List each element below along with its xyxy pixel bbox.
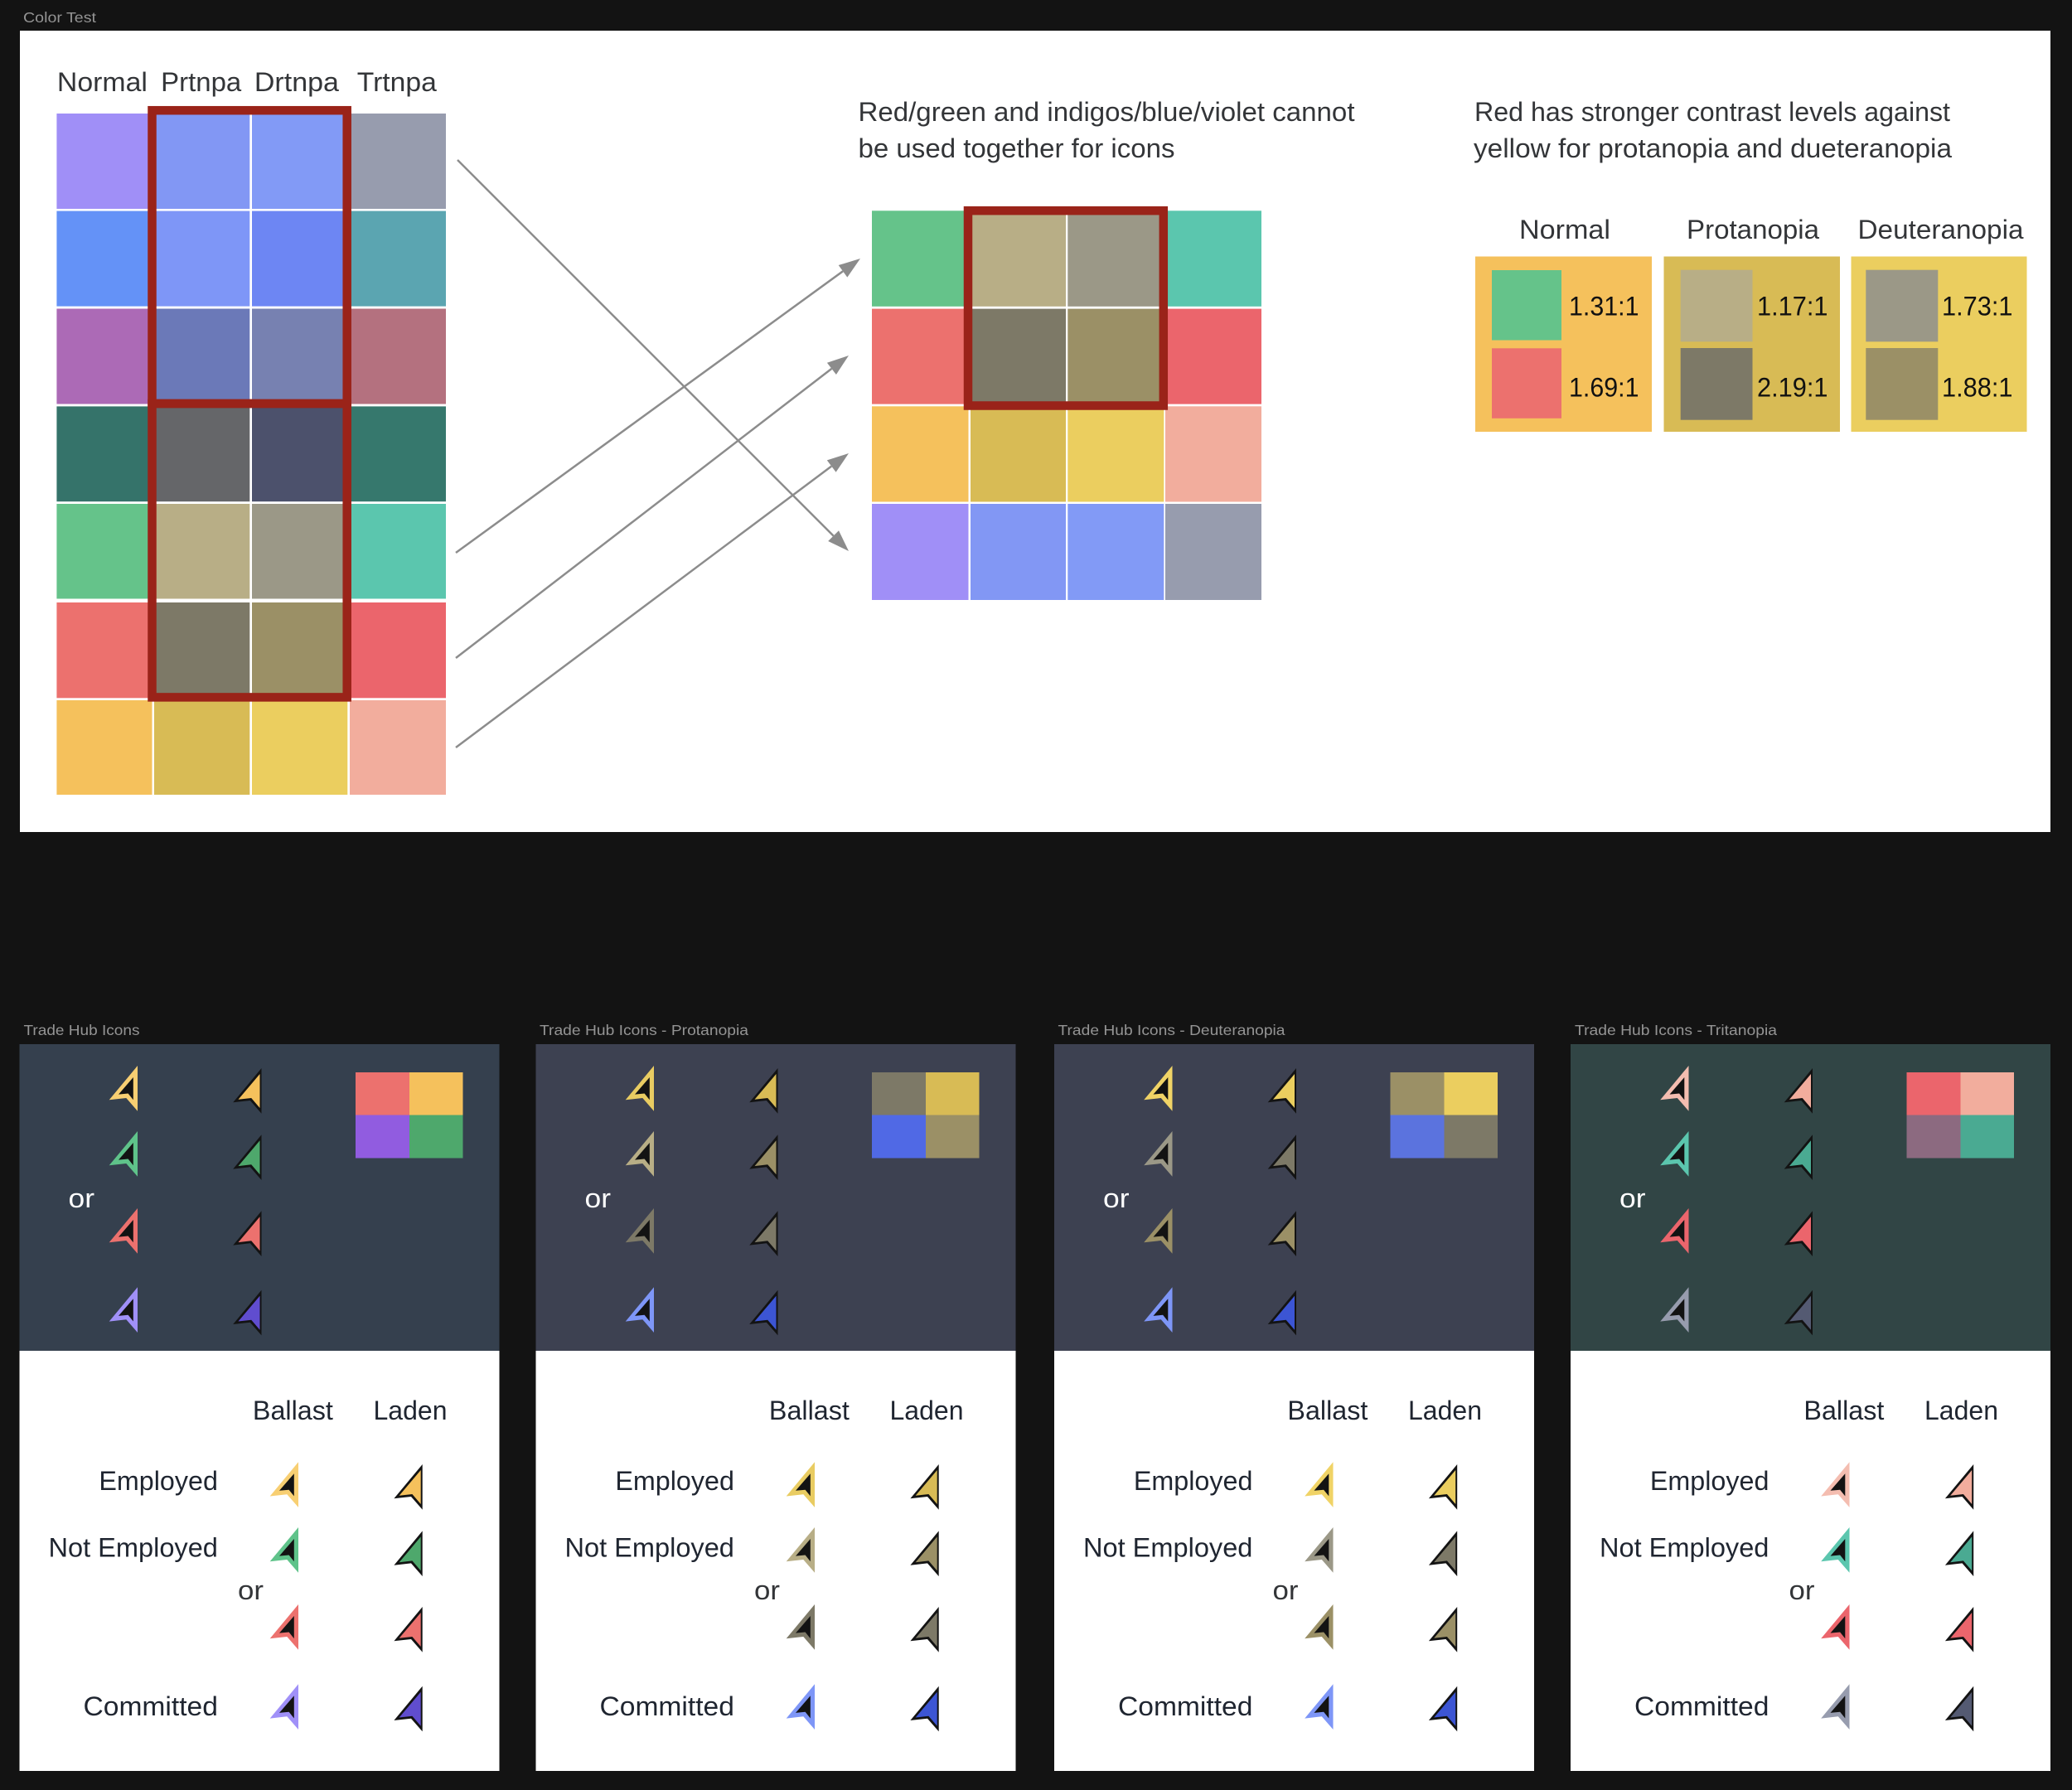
reduced color grid (872, 210, 1261, 600)
icon: ballast olive (1305, 1604, 1333, 1650)
icon: laden red (1945, 1607, 1973, 1652)
label: or: or (1619, 1183, 1646, 1213)
icon: solid tan (749, 1134, 777, 1180)
icon: solid olive (1268, 1211, 1296, 1256)
icon: outlined yellow (109, 1066, 138, 1111)
icon: solid blue (1268, 1290, 1296, 1335)
icon: outlined yellow (626, 1066, 654, 1111)
icon: solid yellow (233, 1068, 262, 1114)
label: Employed: Employed (99, 1466, 218, 1496)
icon: outlined teal (1660, 1131, 1689, 1177)
heading: Protanopia contrast: Protanopia (1687, 215, 1819, 244)
legend background (1054, 1351, 1534, 1771)
icon: laden blue (1429, 1686, 1457, 1731)
heading: Laden: Laden (1924, 1396, 1998, 1425)
heading: Ballast: Ballast (1287, 1396, 1368, 1425)
icon: solid red (233, 1211, 262, 1256)
contrast card: Deuteranopia (1852, 257, 2027, 432)
icon: laden tan (910, 1531, 939, 1576)
icon: ballast gray (1821, 1684, 1850, 1730)
text block: contrast note (1474, 97, 1952, 163)
map preview background (1054, 1044, 1534, 1351)
icon: laden olive (1429, 1607, 1457, 1652)
icon: ballast gray (1305, 1527, 1333, 1573)
icon: laden olive (910, 1607, 939, 1652)
label: Not Employed: Not Employed (48, 1533, 218, 1563)
heading: Tritanopia column: Trtnpa (357, 67, 437, 97)
heading: Protanopia column: Prtnpa (161, 67, 241, 97)
heading: Ballast: Ballast (769, 1396, 850, 1425)
icon: outlined red (1660, 1208, 1689, 1254)
icon: outlined violet (109, 1287, 138, 1333)
label: Committed: Committed (600, 1691, 734, 1721)
icon: laden yellow (910, 1464, 939, 1510)
contrast card: Deuteranopia: 1.88:1 (1942, 373, 2012, 403)
label: Not Employed: Not Employed (565, 1533, 734, 1563)
label: or: or (1103, 1183, 1130, 1213)
icon: laden dark olive (1429, 1531, 1457, 1576)
panel: color test (20, 31, 2050, 832)
panel: Trade Hub Icons - Protanopia (535, 1022, 1016, 1771)
label: Not Employed: Not Employed (1600, 1533, 1769, 1563)
contrast card: Normal (1475, 257, 1652, 432)
contrast card: Protanopia: 1.17:1 (1757, 292, 1828, 322)
icon: laden peach (1945, 1464, 1973, 1510)
icon: ballast red (1821, 1604, 1850, 1650)
label: Committed: Committed (1118, 1691, 1252, 1721)
contrast card: Normal: 1.31:1 (1569, 292, 1639, 322)
label: or: or (754, 1575, 780, 1605)
label: or: or (1273, 1575, 1299, 1605)
heading: Deuteranopia column: Drtnpa (254, 67, 339, 97)
heading: Laden: Laden (373, 1396, 448, 1425)
color swatches (872, 1072, 980, 1159)
frame label: Color Test: Color Test (23, 9, 96, 26)
icon: ballast dark olive (787, 1604, 815, 1650)
panel: Trade Hub Icons (20, 1022, 499, 1771)
frame label: Trade Hub Icons - Protanopia (540, 1022, 748, 1038)
label: or: or (238, 1575, 264, 1605)
icon: solid red (1784, 1211, 1813, 1256)
icon: ballast red (270, 1604, 298, 1650)
label: or: or (585, 1183, 611, 1213)
icon: laden red (394, 1607, 423, 1652)
icon: outlined gray (1144, 1131, 1172, 1177)
label: Employed: Employed (1650, 1466, 1769, 1496)
icon: solid olive (749, 1211, 777, 1256)
text block: icon color note: Red/green and indigos/blue/violet cannot (859, 97, 1355, 127)
icon: outlined olive (1144, 1208, 1172, 1254)
icon: ballast blue (1305, 1684, 1333, 1730)
arrow: yellow row to reduced grid (456, 453, 849, 747)
icon: solid slate (1784, 1290, 1813, 1335)
icon: ballast green (270, 1527, 298, 1573)
highlight: red and green cells (968, 210, 1164, 406)
label: or: or (68, 1183, 94, 1213)
legend background (20, 1351, 499, 1771)
color swatches (1906, 1072, 2014, 1159)
contrast card: Normal: 1.69:1 (1569, 373, 1639, 403)
panel: Trade Hub Icons - Deuteranopia (1054, 1022, 1534, 1771)
icon: solid teal (1784, 1134, 1813, 1180)
icon: ballast yellow (1305, 1462, 1333, 1507)
icon: laden slate (1945, 1686, 1973, 1731)
label: Employed: Employed (615, 1466, 734, 1496)
icon: solid violet (233, 1290, 262, 1335)
icon: solid blue (749, 1290, 777, 1335)
icon: laden violet (394, 1686, 423, 1731)
panel: Trade Hub Icons - Tritanopia (1571, 1022, 2050, 1771)
contrast card: Protanopia: 2.19:1 (1757, 373, 1828, 403)
arrow: violet row to reduced grid (457, 160, 849, 551)
heading: Laden: Laden (1408, 1396, 1482, 1425)
text block: icon color note: be used together for icons (859, 133, 1175, 163)
icon: ballast blue (787, 1684, 815, 1730)
icon: ballast tan (787, 1527, 815, 1573)
contrast card: Deuteranopia: 1.73:1 (1942, 292, 2012, 322)
icon: ballast violet (270, 1684, 298, 1730)
heading: Normal contrast: Normal (1519, 215, 1610, 244)
text block: contrast note: yellow for protanopia and dueteranopia (1474, 133, 1952, 163)
icon: outlined blue (626, 1287, 654, 1333)
icon: ballast teal (1821, 1527, 1850, 1573)
legend background (535, 1351, 1016, 1771)
label: or: or (1789, 1575, 1815, 1605)
icon: solid peach (1784, 1068, 1813, 1114)
frame label: Trade Hub Icons - Deuteranopia (1058, 1022, 1285, 1038)
icon: solid yellow (749, 1068, 777, 1114)
icon: ballast peach (1821, 1462, 1850, 1507)
icon: outlined gray (1660, 1287, 1689, 1333)
contrast card: Protanopia (1664, 257, 1840, 432)
highlight: green, red and yellow group (152, 404, 347, 697)
icon: outlined peach (1660, 1066, 1689, 1111)
heading: Ballast: Ballast (1803, 1396, 1885, 1425)
icon: laden teal (1945, 1531, 1973, 1576)
label: Committed: Committed (1634, 1691, 1769, 1721)
legend background (1571, 1351, 2050, 1771)
text block: contrast note: Red has stronger contrast levels against (1474, 97, 1950, 127)
icon: outlined dark olive (626, 1208, 654, 1254)
map preview background (20, 1044, 499, 1351)
icon: outlined yellow (1144, 1066, 1172, 1111)
map preview background (1571, 1044, 2050, 1351)
label: Employed: Employed (1134, 1466, 1252, 1496)
frame label: Trade Hub Icons - Tritanopia (1575, 1022, 1777, 1038)
icon: outlined tan (626, 1131, 654, 1177)
icon: solid yellow (1268, 1068, 1296, 1114)
arrow: red row to reduced grid (456, 356, 849, 658)
icon: laden yellow (1429, 1464, 1457, 1510)
icon: ballast yellow (787, 1462, 815, 1507)
icon: ballast yellow (270, 1462, 298, 1507)
icon: solid green (233, 1134, 262, 1180)
heading: Laden: Laden (890, 1396, 963, 1425)
heading: Deuteranopia contrast: Deuteranopia (1858, 215, 2024, 244)
arrow: green row to reduced grid (456, 259, 860, 553)
icon: laden blue (910, 1686, 939, 1731)
label: Committed: Committed (83, 1691, 218, 1721)
map preview background (535, 1044, 1016, 1351)
icon: outlined blue (1144, 1287, 1172, 1333)
icon: outlined red (109, 1208, 138, 1254)
color swatches (1391, 1072, 1498, 1159)
text block: icon color note (859, 97, 1355, 163)
color swatches (356, 1072, 462, 1159)
heading: Ballast: Ballast (253, 1396, 333, 1425)
icon: laden green (394, 1531, 423, 1576)
color matrix: seven hues by four vision types (56, 114, 446, 795)
label: Not Employed: Not Employed (1083, 1533, 1252, 1563)
icon: solid dark olive (1268, 1134, 1296, 1180)
frame label: Trade Hub Icons (23, 1022, 140, 1038)
icon: outlined green (109, 1131, 138, 1177)
highlight: indigo, blue and violet group (152, 110, 347, 404)
heading: Normal column: Normal (57, 67, 148, 97)
icon: laden yellow (394, 1464, 423, 1510)
